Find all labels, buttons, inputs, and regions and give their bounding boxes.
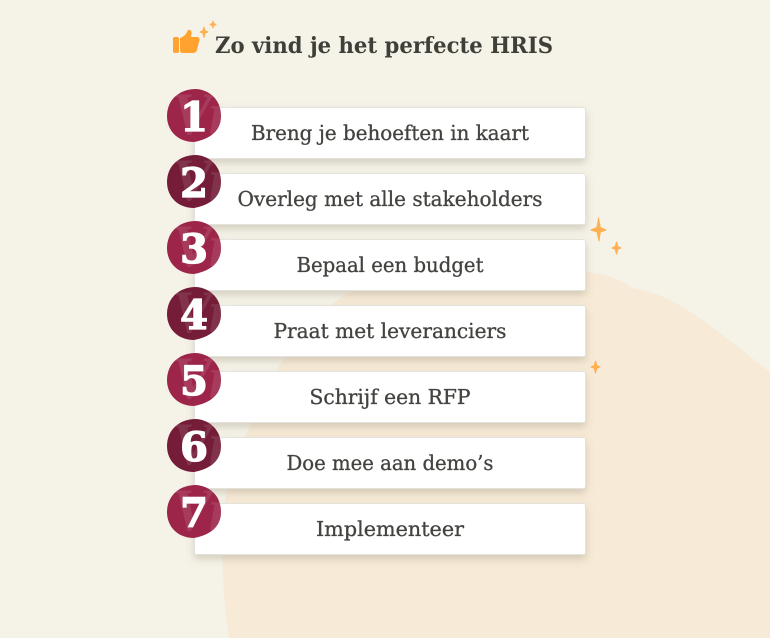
icon: large sparkle right <box>591 218 606 241</box>
heading: Zo vind je het perfecte HRIS <box>215 33 553 59</box>
card 7 <box>194 504 586 554</box>
badge 5: Vr <box>172 345 233 411</box>
icon: thumbs up <box>173 30 200 53</box>
badge 3: 3 <box>180 226 208 273</box>
step 1 <box>167 81 586 158</box>
step 6 <box>167 411 586 488</box>
icon: small sparkle lower <box>591 361 600 373</box>
badge 1: Vr <box>172 81 233 147</box>
label 2: Overleg met alle stakeholders <box>238 187 542 211</box>
card 2 <box>194 174 586 224</box>
card 5 <box>194 372 586 422</box>
badge 5: 5 <box>180 358 208 405</box>
badge 4: Vr <box>172 279 233 345</box>
card 3 <box>194 240 586 290</box>
step 7 <box>167 477 586 554</box>
badge 2: Vr <box>172 147 233 213</box>
label 6: Doe mee aan demo’s <box>286 451 494 475</box>
badge 6: 6 <box>180 424 208 471</box>
title <box>173 21 553 59</box>
badge 6: Vr <box>172 411 233 477</box>
card 1 <box>194 108 586 158</box>
badge 7: 7 <box>180 490 208 537</box>
icon: small sparkle right <box>612 242 621 254</box>
badge 3: Vr <box>172 213 233 279</box>
label 5: Schrijf een RFP <box>310 385 471 409</box>
step 4 <box>167 279 586 356</box>
badge 1: 1 <box>180 94 208 141</box>
badge 4: 4 <box>180 292 208 339</box>
step 2 <box>167 147 586 224</box>
label 1: Breng je behoeften in kaart <box>251 121 530 145</box>
card 6 <box>194 438 586 488</box>
icon: sparkles <box>200 21 216 38</box>
badge 2: 2 <box>180 160 208 207</box>
label 4: Praat met leveranciers <box>274 319 506 343</box>
step 5 <box>167 345 586 422</box>
label 7: Implementeer <box>316 517 464 541</box>
label 3: Bepaal een budget <box>296 253 484 277</box>
card 4 <box>194 306 586 356</box>
badge 7: Vr <box>172 477 233 543</box>
step 3 <box>167 213 586 290</box>
background blob <box>222 271 770 638</box>
